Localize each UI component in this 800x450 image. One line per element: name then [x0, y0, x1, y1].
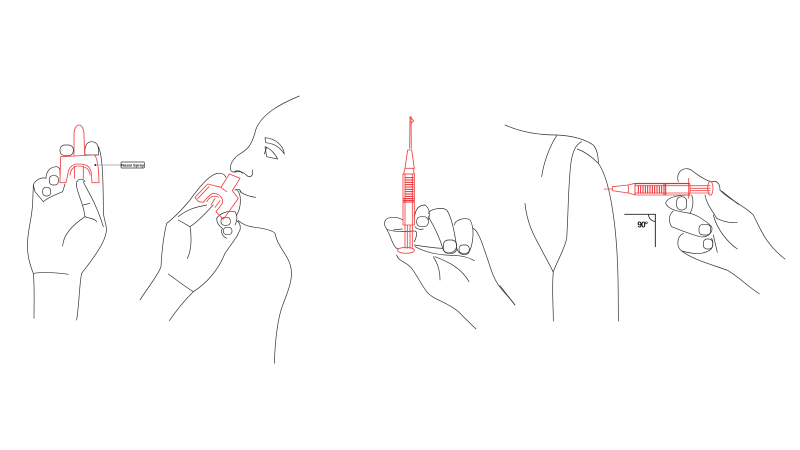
panel: injection into upper arm	[500, 125, 785, 321]
panel: person using nasal spray	[140, 96, 299, 363]
callout: nasal spray label: Nasal Spray	[121, 162, 145, 167]
face and neck outline	[230, 96, 299, 363]
syringe upright	[398, 117, 414, 253]
nasal spray device in use	[195, 174, 240, 219]
callout: nasal spray label	[94, 162, 145, 168]
hand outline	[27, 142, 106, 320]
hand outline	[140, 173, 241, 321]
panel: hand holding syringe upright	[384, 117, 515, 329]
hand outline	[666, 169, 785, 294]
90 degree angle marker	[624, 214, 655, 247]
arm and shoulder outline	[500, 125, 618, 321]
panel: hand holding nasal spray	[27, 125, 145, 320]
hand outline	[384, 205, 515, 329]
syringe horizontal	[604, 178, 713, 198]
nasal spray device	[60, 125, 99, 183]
90 degree angle marker: 90°	[637, 220, 648, 229]
